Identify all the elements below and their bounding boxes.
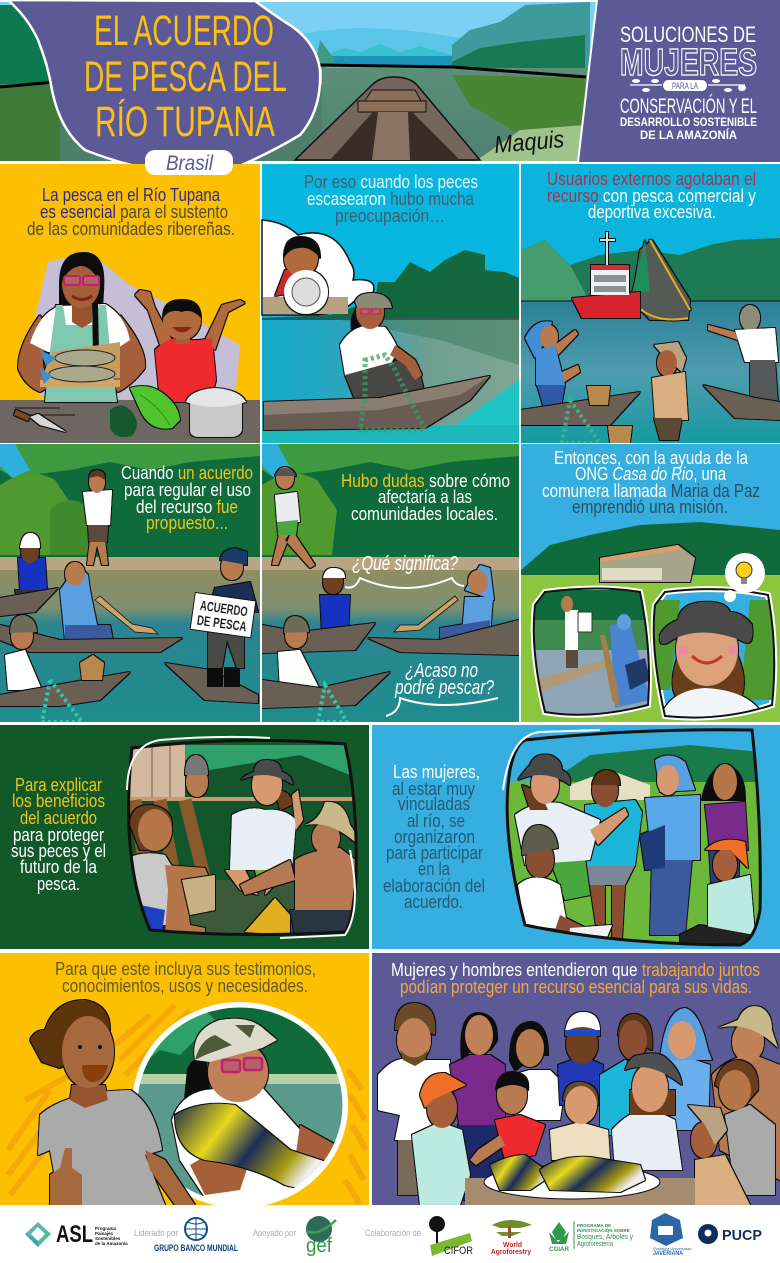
panel 5 text: comunidades locales.: [351, 503, 498, 524]
panel 3 text: recurso con pesca comercial y: [547, 185, 757, 206]
hooded woman: [655, 1008, 712, 1130]
panel 7 text: pesca.: [37, 873, 80, 894]
boat: [0, 672, 130, 706]
thought bubble with worried boy: [262, 220, 374, 315]
woman in cyan top: [585, 770, 642, 940]
water: [262, 318, 519, 443]
boat: [262, 623, 375, 653]
panel 9 text: Para que este incluya sus testimonios,: [55, 958, 316, 979]
woman with net in boat: [340, 293, 425, 400]
man with straw hat: [712, 1006, 780, 1180]
boat right: [703, 385, 780, 420]
icon: basket: [182, 875, 215, 915]
panel 5 text: [341, 470, 510, 524]
man thinking: [83, 470, 112, 565]
scene: portrait of Maria da Paz: [650, 589, 775, 718]
boat: [264, 376, 490, 430]
title blob: [8, 0, 320, 168]
fisher in blue tank: [15, 533, 48, 602]
series panel: [578, 0, 780, 162]
fisher in blue tank: [320, 568, 350, 635]
woman in purple top: [702, 764, 748, 900]
logo: Grupo Banco Mundial: Liderado por: [134, 1228, 178, 1238]
plate with fish: [484, 1155, 660, 1199]
fishing net: [42, 680, 82, 722]
panel 7: explaining benefits: [0, 725, 369, 949]
logo: PUCP: [698, 1224, 762, 1244]
peeking woman with cap: [185, 755, 208, 797]
panel 8 text: acuerdo.: [404, 891, 463, 912]
logo: CGIAR programme: PROGRAMA DE: [577, 1223, 611, 1228]
icon: leaf sprigs and pill: [630, 79, 746, 92]
speech: acaso no podré pescar: podré pescar?: [394, 677, 495, 699]
series panel: DE LA AMAZONÍA: [640, 129, 737, 142]
panel 6 text: ONG Casa do Rio, una: [575, 463, 727, 484]
icon: fish: [490, 1155, 552, 1190]
panel 8 text: al estar muy: [392, 778, 476, 799]
woman laughing in gray: [715, 1060, 775, 1195]
panel 4 text: [121, 462, 253, 533]
logo: Javeriana: [650, 1213, 691, 1257]
red fishing boat: [572, 232, 640, 318]
title text: DE PESCA DEL: [84, 53, 287, 101]
panel 3: external users: [521, 164, 780, 443]
icon: paddle: [394, 596, 458, 632]
woman in cyan: [600, 1014, 652, 1135]
panel 8 text: vinculadas: [398, 793, 470, 814]
panel 2 text: escasearon hubo mucha: [307, 188, 475, 209]
fisher woman: [172, 1019, 345, 1205]
logo: World Agroforestry: [491, 1220, 532, 1256]
panel 10 text: [391, 959, 760, 997]
speech: acaso no podré pescar: [386, 660, 498, 716]
fishing net: [318, 685, 347, 722]
sign: acuerdo de pesca: ACUERDO: [199, 597, 249, 619]
standing woman in dotted shirt: [225, 760, 303, 895]
icon: bananas: [130, 386, 180, 429]
table: [465, 1178, 695, 1205]
icon: idea bubble with bulb: [724, 553, 765, 602]
fisherman with straw hat: [240, 802, 358, 936]
panel 1: fishing is essential: [0, 164, 260, 443]
icon: arm: [190, 1145, 250, 1195]
panel 4 text: Cuando un acuerdo: [121, 462, 253, 483]
logo: GEF: Apoyado por: [253, 1228, 296, 1238]
logo: World Agroforestry: Agroforestry: [491, 1247, 532, 1256]
girl in floral shirt: [550, 1082, 610, 1160]
signature: Maquis: Maquis: [493, 126, 565, 159]
title text: RÍO TUPANA: [95, 98, 275, 146]
hooded woman with bag: [640, 755, 700, 935]
boy with raised arms: [135, 290, 245, 402]
panel 7 text: del acuerdo: [20, 807, 97, 828]
fishing net: [632, 240, 690, 320]
series panel: DESARROLLO SOSTENIBLE: [620, 117, 757, 129]
speech: qué significa: ¿Qué significa?: [352, 553, 459, 575]
circular scene: woman with fish: [130, 1005, 350, 1209]
panel 6: Maria da Paz mission: [521, 444, 780, 722]
man pointing: [708, 305, 778, 403]
icon: paddle: [95, 596, 158, 634]
icon: basket: [587, 386, 610, 405]
panel 1 text: [27, 184, 235, 239]
house: [600, 545, 695, 582]
logo: CIFOR: [365, 1216, 473, 1257]
hills: [521, 522, 780, 722]
boat left: [521, 392, 640, 425]
framed scene: group of women: [500, 725, 770, 950]
panel 4 text: para regular el uso: [124, 479, 251, 500]
panel 8 text: en la: [418, 858, 451, 879]
logo: CGIAR programme: Bosques, Árboles y: [577, 1232, 633, 1241]
icon: tropical fish: [175, 1104, 335, 1188]
Brasil label: [145, 150, 233, 175]
forest: [521, 238, 780, 302]
panel 4: agreement proposed: [0, 444, 260, 722]
woman in white with glasses: [510, 1022, 565, 1120]
boat: [368, 620, 519, 655]
panel 7 text: futuro de la: [20, 856, 98, 877]
boy with cap, back view: [688, 1105, 750, 1205]
logo: ASL: Programa: [95, 1226, 117, 1231]
footer logos: [0, 1205, 780, 1263]
panel 1 text: de las comunidades ribereñas.: [27, 218, 235, 239]
Brasil label: Brasil: [166, 152, 214, 175]
logo: Javeriana: JAVERIANA: [653, 1251, 684, 1257]
panel 10 text: Mujeres y hombres entendieron que trabajando juntos: [391, 959, 760, 980]
sign: acuerdo de pesca: DE PESCA: [196, 612, 248, 634]
officer holding sign: [165, 548, 258, 703]
framed scene: women talking with fisher: [120, 735, 365, 940]
Maria with hat: [515, 754, 628, 900]
title text: EL ACUERDO: [94, 7, 274, 55]
panel 3 text: deportiva excesiva.: [588, 201, 716, 222]
panel 8 text: organizaron: [394, 826, 475, 847]
forest: [262, 250, 519, 320]
camo woman: [278, 616, 320, 690]
panel 2 text: preocupación…: [335, 205, 445, 226]
logo: CGIAR programme: INVESTIGACIÓN SOBRE: [577, 1226, 630, 1233]
woman in blue pointing: [525, 321, 580, 412]
logo: PUCP: PUCP: [722, 1227, 762, 1244]
Maria with hat: [612, 1053, 682, 1170]
panel 7 text: [11, 774, 106, 894]
panel 6 text: emprendió una misión.: [572, 496, 728, 517]
panel 9 text: conocimientos, usos y necesidades.: [62, 975, 308, 996]
woman speaking: [30, 1000, 195, 1205]
panel 8 text: Las mujeres,: [393, 761, 480, 782]
orange scribble: [8, 1005, 366, 1204]
shore line: [262, 318, 519, 320]
panel 1 text: es esencial para el sustento: [40, 201, 228, 222]
woman with tray of fish: [18, 253, 145, 402]
logo: CIFOR: CIFOR: [444, 1245, 473, 1257]
panel 2 text: Por eso cuando los peces: [304, 171, 478, 192]
fishing net: [562, 400, 600, 443]
logo: CGIAR programme: CGIAR: [549, 1246, 569, 1253]
water: [521, 301, 780, 443]
boy eating from plate: [275, 237, 328, 314]
boat: [262, 672, 390, 708]
panel 2 text: [304, 171, 478, 226]
icon: knife: [14, 410, 66, 432]
walking woman: [272, 467, 315, 568]
panel 7 text: sus peces y el: [11, 840, 106, 861]
panel 10: working together: [372, 953, 780, 1205]
panel 8 text: al río, se: [407, 810, 465, 831]
panel 2: scarcity worry: [262, 164, 519, 443]
logo: ASL: Sostenibles: [95, 1236, 121, 1241]
man with blue tank and cap: [558, 1012, 603, 1105]
icon: leaf sprigs and pill: PARA LA: [672, 81, 698, 91]
panel 5: doubts: [262, 444, 519, 722]
icon: pot: [186, 388, 246, 437]
hooded woman paddling: [440, 565, 494, 640]
logo: ASL: de la Amazonía: [95, 1241, 128, 1246]
panel 6 text: comunera llamada Maria da Paz: [542, 480, 760, 501]
woman in purple: [450, 1013, 506, 1200]
panel 6 text: [542, 447, 760, 517]
fishing net: [360, 355, 425, 430]
logo: GEF: [253, 1216, 336, 1257]
panel 5 text: Hubo dudas sobre cómo: [341, 470, 510, 491]
speech: qué significa: [345, 553, 464, 588]
logo: ASL: Paisajes: [95, 1231, 114, 1236]
hooded woman paddling: [60, 562, 113, 640]
boat: [0, 588, 58, 616]
icon: fish: [540, 1157, 645, 1192]
panel 7 text: para proteger: [13, 824, 104, 845]
water: [262, 570, 519, 722]
logo: CGIAR programme: [549, 1221, 633, 1253]
panel 5 text: afectaría a las: [378, 486, 472, 507]
icon: yellow cloth: [245, 898, 290, 935]
panel 8 text: [383, 761, 485, 912]
speech: acaso no podré pescar: ¿Acaso no: [405, 660, 478, 682]
logo: CGIAR programme: Agroforestería: [577, 1239, 614, 1248]
seated woman: [125, 805, 208, 934]
panel 8 text: elaboración del: [383, 875, 485, 896]
panel 8: women organized: [372, 725, 780, 950]
header scene: river and boat: [0, 2, 600, 168]
panel 7 text: Para explicar: [15, 774, 102, 795]
man with beard: [378, 1003, 450, 1195]
logo: GEF: gef: [306, 1235, 332, 1257]
camo woman with net: [5, 615, 42, 690]
logo: World Agroforestry: World: [503, 1240, 522, 1249]
counter with kitchen items: [0, 400, 260, 443]
kid looking at boat: [652, 342, 688, 440]
sign: acuerdo de pesca: [191, 593, 255, 637]
icon: greens: [110, 405, 137, 437]
panel 4 text: del recurso fue: [136, 496, 238, 517]
icon: basket: [608, 426, 632, 443]
logo: ASL: [25, 1221, 128, 1248]
scene: man with sign and hooded woman: [530, 588, 655, 720]
panel 1 text: La pesca en el Río Tupana: [42, 184, 221, 205]
woman with cap writing: [518, 825, 612, 942]
boat: [165, 663, 258, 703]
man with orange cap: [680, 840, 755, 950]
title text: [84, 7, 287, 146]
community group: [378, 1003, 780, 1205]
boat: [0, 625, 182, 652]
man with orange cap: [412, 1073, 470, 1205]
logo: Grupo Banco Mundial: GRUPO BANCO MUNDIAL: [154, 1243, 238, 1254]
logo: Javeriana: Pontificia Universidad: [653, 1246, 691, 1251]
panel 4 text: propuesto...: [146, 512, 228, 533]
logo: Grupo Banco Mundial: [134, 1218, 238, 1254]
panel 9 text: [55, 958, 316, 996]
boy in red: [470, 1072, 545, 1165]
panel 8 text: para participar: [386, 842, 483, 863]
panel 9: testimonies: [0, 953, 369, 1209]
logo: CIFOR: Colaboración de: [365, 1228, 421, 1238]
panel 7 text: los beneficios: [12, 790, 105, 811]
logo: ASL: ASL: [56, 1221, 93, 1248]
water: [0, 570, 260, 722]
icon: basket: [80, 655, 104, 680]
panel 3 text: [547, 168, 757, 222]
